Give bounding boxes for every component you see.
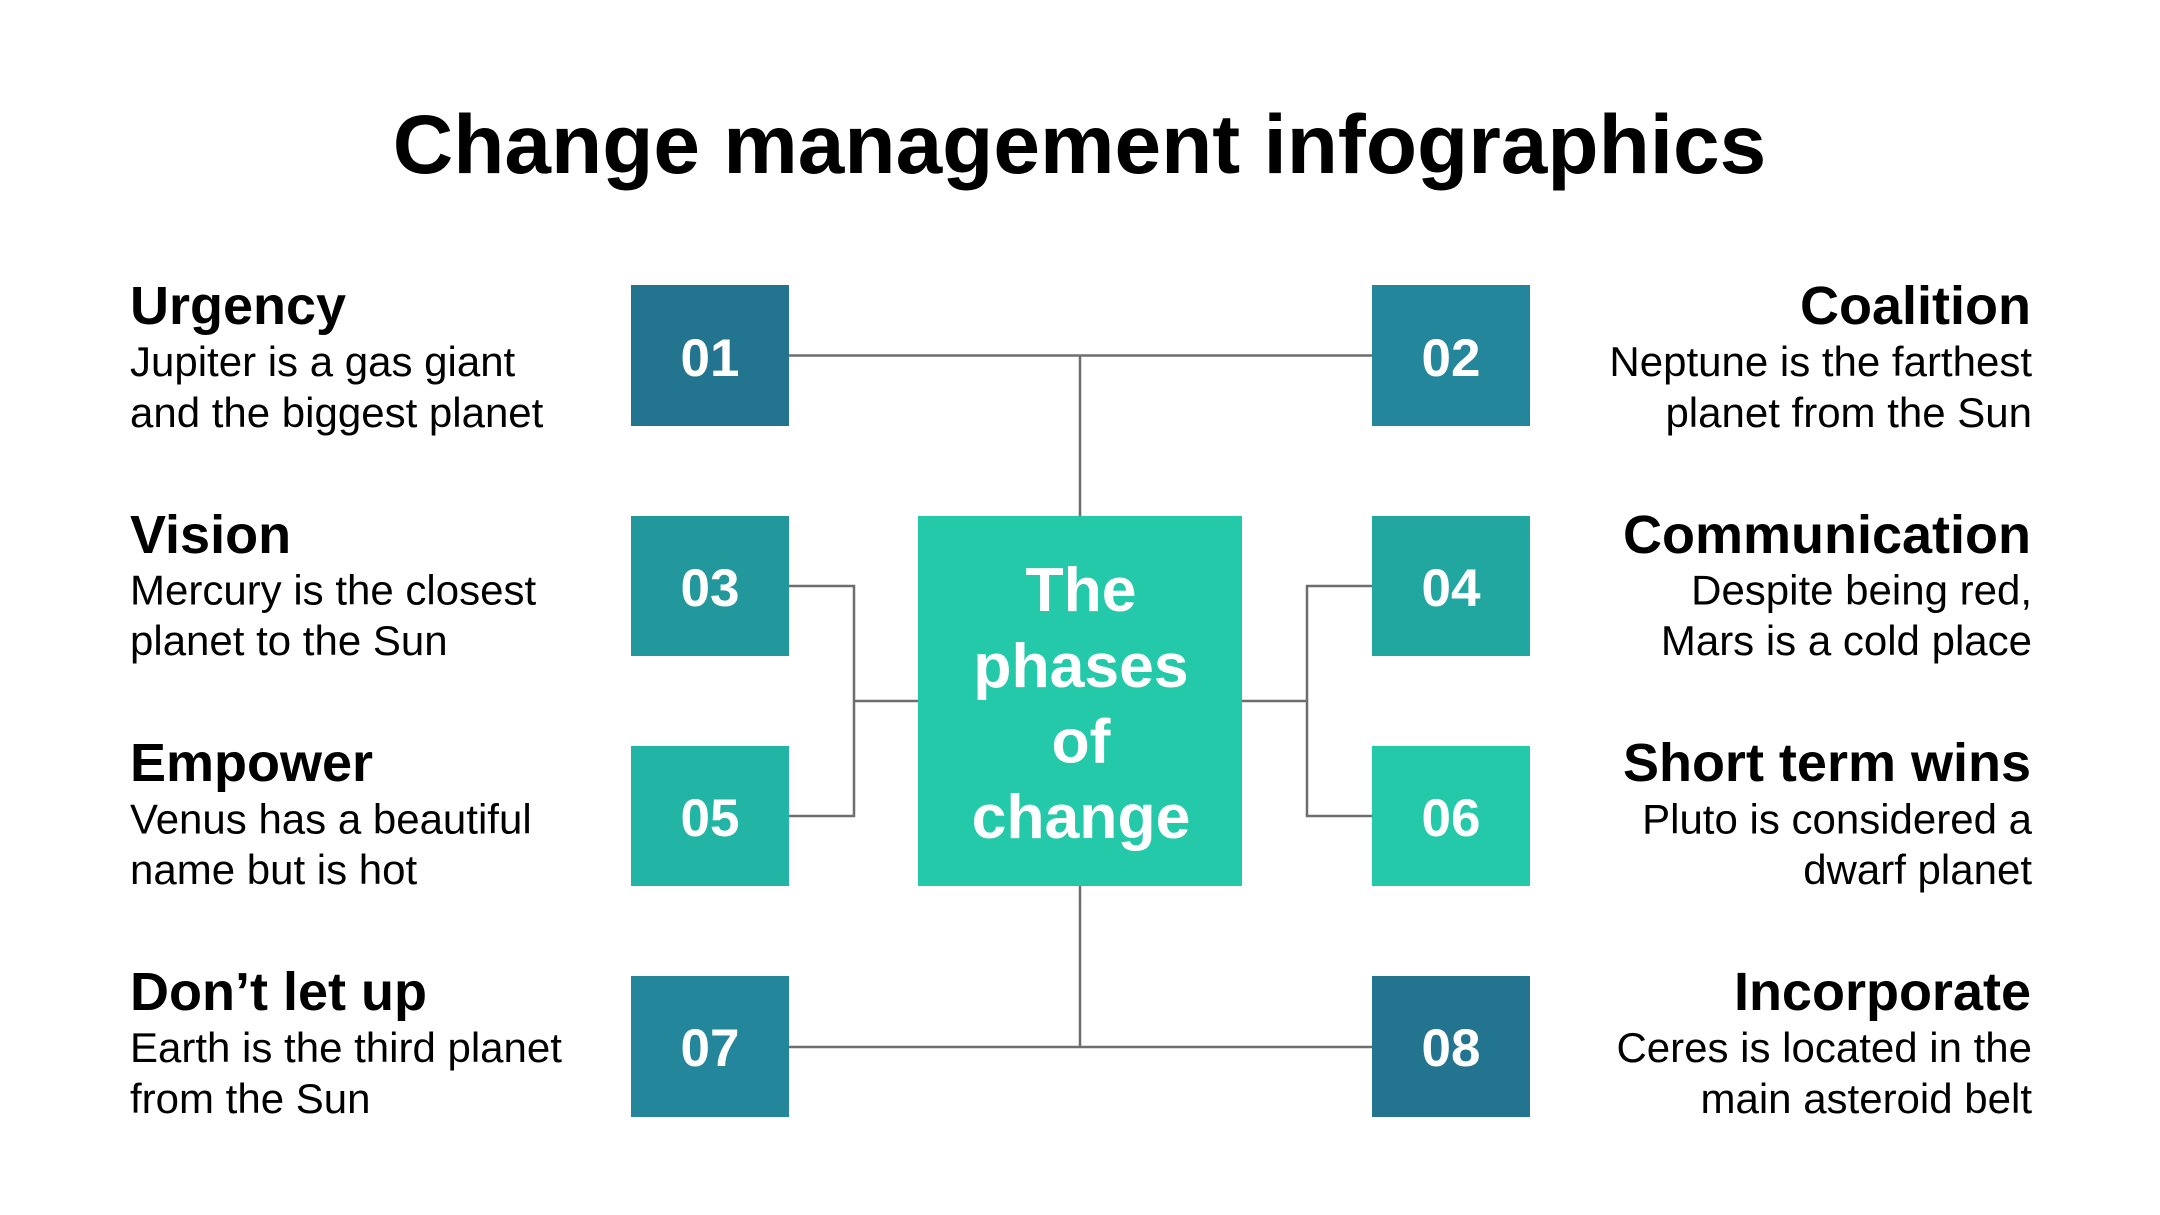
central box: the phases of change: change [972,782,1190,852]
number box 03 [631,516,789,656]
central box: the phases of change: phases [973,631,1189,701]
text block: Urgency: and the biggest planet [130,389,544,436]
text block: Communication: Mars is a cold place [1661,617,2032,664]
text block: Incorporate: Ceres is located in the [1616,1024,2032,1071]
text block: Coalition: planet from the Sun [1665,389,2032,436]
text block: Coalition [1609,276,2032,436]
text block: Incorporate [1616,962,2032,1122]
text block: Short term wins: Short term wins [1623,733,2031,793]
central box: the phases of change: of [1052,706,1111,776]
text block: Don't let up: Don’t let up [130,962,427,1022]
number box 03: 03 [681,559,739,618]
text block: Incorporate: main asteroid belt [1700,1075,2032,1122]
number box 08: 08 [1422,1019,1480,1078]
text block: Vision [130,505,536,664]
text block: Urgency: Urgency [130,276,346,336]
number box 07 [631,976,789,1117]
number box 04 [1372,516,1530,656]
central box: the phases of change [918,516,1242,886]
text block: Vision: planet to the Sun [130,617,448,664]
text block: Short term wins: Pluto is considered a [1642,796,2033,842]
connector lines [789,356,1372,1047]
text block: Don't let up: Earth is the third planet [130,1024,562,1071]
text block: Incorporate: Incorporate [1734,962,2031,1022]
text block: Empower: name but is hot [130,846,418,893]
text block: Empower: Venus has a beautiful [130,796,532,842]
number box 01: 01 [681,329,739,388]
number box 07: 07 [681,1019,739,1078]
text block: Short term wins [1623,733,2033,893]
central box: the phases of change: The [1025,555,1137,625]
text block: Communication [1623,505,2032,664]
text block: Empower [130,733,532,893]
number box 08 [1372,976,1530,1117]
text block: Don't let up [130,962,562,1122]
number box 02: 02 [1422,329,1480,388]
number box 05 [631,746,789,886]
number box 01 [631,285,789,426]
text block: Don't let up: from the Sun [130,1075,370,1122]
text block: Communication: Communication [1623,505,2031,565]
title: Change management infographics [393,97,1766,191]
number box 04: 04 [1422,559,1481,618]
text block: Urgency: Jupiter is a gas giant [130,338,516,385]
text block: Urgency [130,276,544,436]
text block: Coalition: Neptune is the farthest [1609,338,2032,385]
number box 06: 06 [1422,789,1480,848]
text block: Communication: Despite being red, [1691,566,2032,614]
number box 02 [1372,285,1530,426]
text block: Empower: Empower [130,733,373,793]
text block: Vision: Vision [130,505,291,565]
number box 05: 05 [681,789,739,848]
text block: Coalition: Coalition [1800,276,2031,336]
text block: Vision: Mercury is the closest [130,566,536,614]
text block: Short term wins: dwarf planet [1803,846,2032,893]
number box 06 [1372,746,1530,886]
